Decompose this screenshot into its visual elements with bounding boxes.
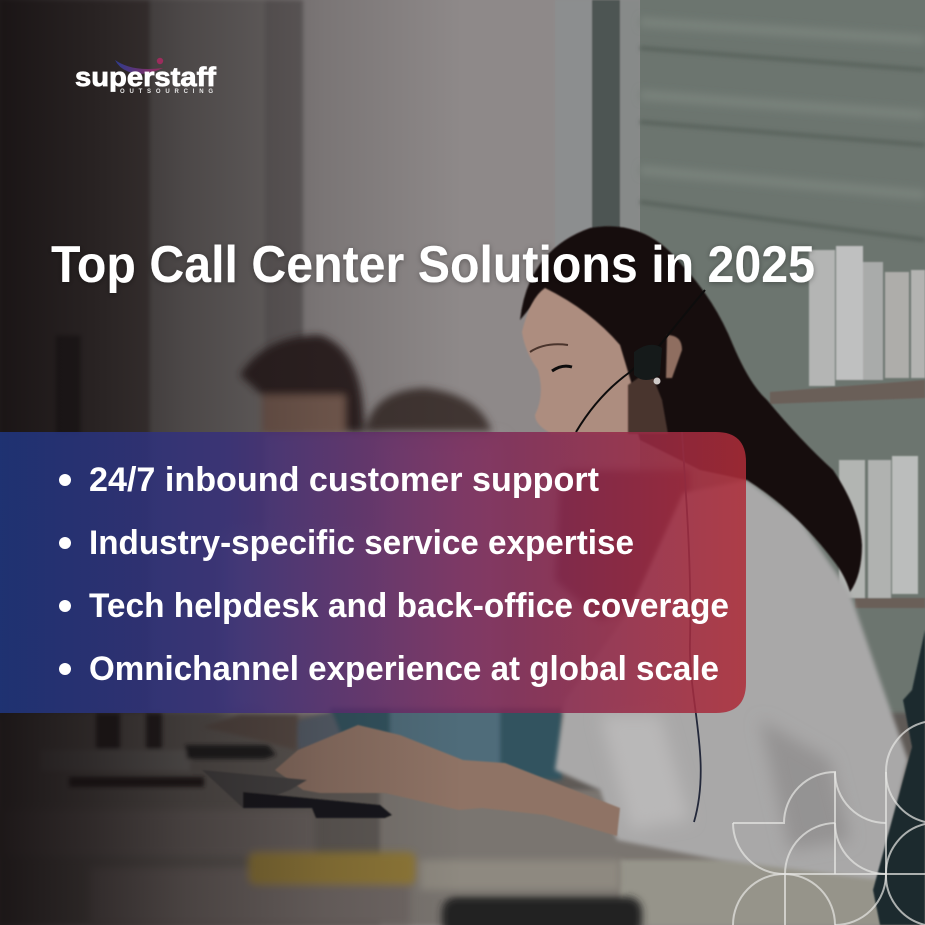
background colleagues	[240, 335, 492, 435]
agent face	[522, 288, 632, 434]
panel: solutions list	[0, 432, 746, 713]
title: Top Call Center Solutions in 2025	[51, 236, 815, 294]
agent arm and hand	[275, 725, 620, 836]
desk clutter	[0, 810, 642, 925]
panel background	[0, 432, 746, 713]
agent eye, brow and headset	[530, 290, 705, 822]
logo tagline: OUTSOURCING	[120, 89, 213, 95]
keyboard	[202, 770, 392, 818]
bullet item 1: 24/7 inbound customer support	[89, 461, 599, 499]
bullet item 3: Tech helpdesk and back-office coverage	[89, 587, 729, 625]
agent shirt	[555, 480, 908, 880]
blinds and shelves wall	[640, 0, 925, 720]
agent hair	[520, 226, 862, 592]
window frame	[555, 0, 640, 250]
colleague hand	[202, 715, 298, 750]
agent dark jacket at right	[873, 630, 925, 925]
bullet item 2: Industry-specific service expertise	[89, 524, 634, 562]
binders upper	[809, 246, 925, 386]
agent torso dark area under panel	[555, 470, 690, 620]
earring	[654, 378, 660, 384]
colleague blue shirt	[293, 708, 562, 780]
colleague bodies beneath panel	[225, 440, 500, 713]
logo swoosh icon	[115, 58, 163, 74]
desk	[0, 713, 925, 925]
left columns and monitor	[0, 0, 303, 720]
bullet item 4: Omnichannel experience at global scale	[89, 650, 719, 688]
logo wordmark: superstaff	[75, 62, 217, 92]
decorative geometric line pattern	[733, 722, 925, 925]
background objects on desk	[40, 713, 276, 787]
upper shelf	[770, 380, 925, 404]
logo: superstaff outsourcing	[75, 58, 217, 95]
agent neck strands and ear	[628, 335, 682, 434]
binders lower	[839, 456, 925, 608]
